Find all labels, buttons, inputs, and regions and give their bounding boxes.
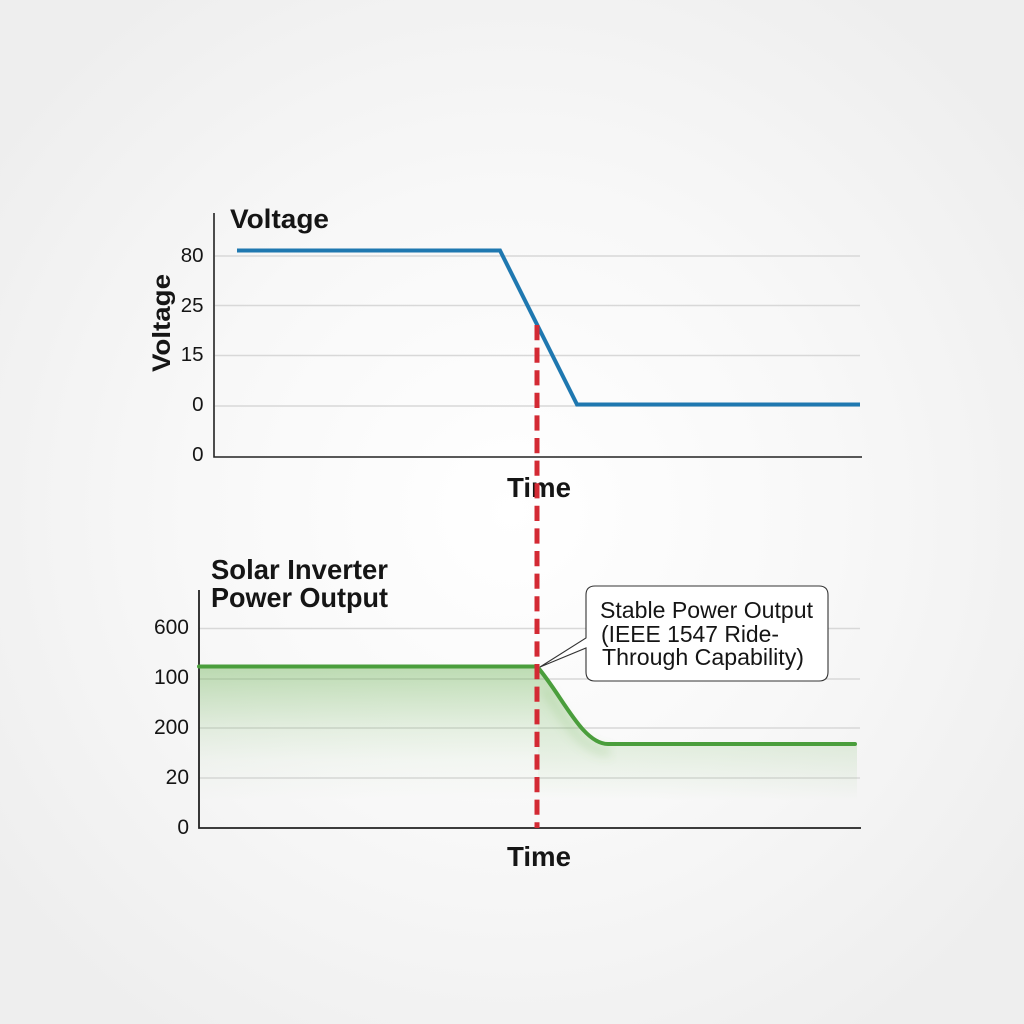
- callout: stable power output: Through Capability): [602, 644, 804, 670]
- voltage y-axis tick labels: 80: [181, 244, 204, 267]
- power chart title: Solar Inverter: [211, 554, 388, 585]
- callout: stable power output: Stable Power Output: [600, 597, 814, 623]
- power x-axis label: Time: [507, 841, 571, 872]
- power chart axes: [199, 590, 861, 828]
- power y-axis tick labels: [154, 616, 189, 839]
- power line: [199, 666, 855, 744]
- voltage line: [237, 250, 860, 404]
- voltage y-axis tick labels: 0: [192, 393, 204, 416]
- voltage x-axis label: Time: [507, 472, 571, 503]
- voltage y-axis tick labels: 15: [181, 343, 204, 366]
- voltage y-axis tick labels: 25: [181, 294, 204, 317]
- voltage chart axes: [214, 213, 862, 457]
- event marker: red dashed line: [534, 325, 540, 828]
- power chart title: Power Output: [211, 582, 388, 613]
- power y-axis tick labels: 20: [166, 766, 189, 789]
- voltage y-axis title: Voltage: [148, 274, 176, 372]
- callout: stable power output: [540, 586, 828, 681]
- power y-axis tick labels: 600: [154, 616, 189, 639]
- power y-axis tick labels: 0: [177, 816, 189, 839]
- callout: stable power output: (IEEE 1547 Ride-: [601, 621, 779, 647]
- voltage chart title: Voltage: [230, 204, 329, 234]
- panel: solar inverter power output chart: [154, 554, 861, 872]
- panel: voltage chart: [148, 204, 862, 503]
- voltage y-axis tick labels: [181, 244, 204, 466]
- power area fill: [199, 667, 857, 800]
- power y-axis tick labels: 200: [154, 716, 189, 739]
- power y-axis tick labels: 100: [154, 666, 189, 689]
- power chart title: [211, 554, 388, 613]
- voltage y-axis tick labels: 0: [192, 443, 204, 466]
